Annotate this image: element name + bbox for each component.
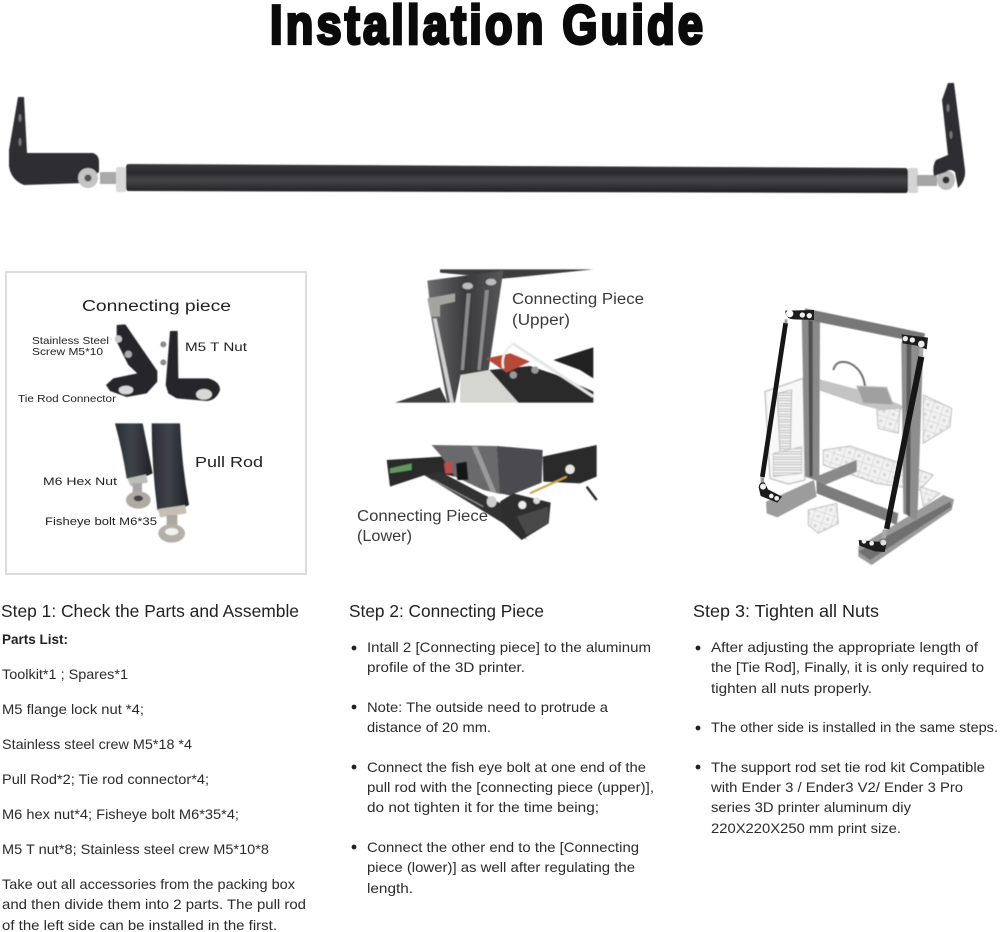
parts list: Pull Rod*2; Tie rod connector*4; bbox=[2, 771, 209, 787]
label: stainless steel screw: Stainless Steel bbox=[32, 335, 109, 347]
bullet: compatibility bbox=[696, 759, 985, 836]
bullet: compatibility: 220X220X250 mm print size. bbox=[711, 820, 901, 836]
pull rod 2 bbox=[152, 423, 189, 511]
bullet: adjust length: tighten all nuts properly. bbox=[711, 680, 872, 696]
parts list: M6 hex nut*4; Fisheye bolt M6*35*4; bbox=[2, 806, 239, 822]
parts list: M5 T nut*8; Stainless steel crew M5*10*8 bbox=[2, 841, 269, 857]
heading: step 2: Step 2: Connecting Piece bbox=[349, 601, 544, 621]
bullet: adjust length bbox=[696, 639, 984, 696]
bullet: compatibility: series 3D printer aluminum diy bbox=[711, 799, 911, 815]
aluminum frame bbox=[766, 308, 954, 565]
right tie rod bbox=[859, 334, 928, 552]
panel: parts photo bbox=[6, 272, 306, 574]
right fisheye bolt bbox=[908, 168, 955, 193]
bullet: compatibility: with Ender 3 / Ender3 V2/ Ender 3 Pro bbox=[710, 779, 963, 795]
label: M5 T nut: M5 T Nut bbox=[185, 340, 248, 354]
bullet: note: Note: The outside need to protrude a bbox=[367, 699, 608, 715]
left fisheye bolt bbox=[78, 167, 126, 192]
instructions paragraph: and then divide them into 2 parts. The pull rod bbox=[2, 896, 306, 912]
pull rod 1 bbox=[115, 423, 153, 479]
heading: step 3: Step 3: Tighten all Nuts bbox=[693, 601, 879, 621]
bullet: install: profile of the 3D printer. bbox=[367, 659, 525, 675]
text block: step 2 bbox=[349, 601, 654, 896]
label: tie rod connector: Tie Rod Connector bbox=[18, 393, 117, 405]
product photo: tie rod with brackets bbox=[9, 83, 965, 193]
bullet: connect other end: piece (lower)] as well after regulating the bbox=[367, 859, 635, 875]
main rod bbox=[126, 164, 908, 193]
parts list: M5 flange lock nut *4; bbox=[2, 701, 144, 717]
label: stainless steel screw: Screw M5*10 bbox=[32, 346, 103, 358]
bullet: install: Intall 2 [Connecting piece] to the aluminum bbox=[367, 639, 651, 655]
instructions paragraph: Take out all accessories from the packing box bbox=[2, 876, 295, 892]
label: fisheye bolt: Fisheye bolt M6*35 bbox=[45, 516, 157, 528]
bullet: note bbox=[352, 699, 608, 735]
label: connecting piece upper: (Upper) bbox=[512, 312, 570, 329]
bullet: connect other end bbox=[352, 839, 639, 896]
ghosted printer parts bbox=[765, 362, 952, 533]
bullet: adjust length: the [Tie Rod], Finally, it is only required to bbox=[711, 659, 984, 675]
right connecting piece bbox=[166, 331, 220, 401]
panel: connecting piece photos bbox=[357, 269, 644, 545]
parts list label: Parts List: bbox=[2, 632, 68, 647]
instructions paragraph bbox=[2, 876, 306, 932]
parts list: Stainless steel crew M5*18 *4 bbox=[2, 736, 192, 752]
bullet: compatibility: The support rod set tie rod kit Compatible bbox=[711, 759, 985, 775]
bullet: connect fish eye bolt: Connect the fish eye bolt at one end of the bbox=[367, 759, 646, 775]
photo: upper connecting piece bbox=[395, 269, 593, 403]
left connecting piece bbox=[106, 324, 157, 397]
right bracket bbox=[933, 83, 965, 188]
bullet: adjust length: After adjusting the appropriate length of bbox=[711, 639, 978, 655]
bullet: other side: The other side is installed in the same steps. bbox=[711, 719, 998, 735]
photo: lower connecting piece bbox=[387, 445, 597, 540]
label: pull rod: Pull Rod bbox=[195, 454, 263, 471]
text block: step 1 bbox=[1, 601, 306, 932]
text block: step 3 bbox=[693, 601, 998, 836]
parts list: Toolkit*1 ; Spares*1 bbox=[2, 666, 128, 682]
label: connecting piece lower: Connecting Piece bbox=[357, 508, 488, 525]
panel: printer frame diagram bbox=[759, 308, 954, 565]
label: connecting piece: Connecting piece bbox=[82, 298, 231, 315]
left bracket bbox=[9, 97, 99, 185]
left tie rod bbox=[759, 310, 814, 503]
bullet: connect fish eye bolt bbox=[352, 759, 654, 815]
bullet: connect other end: length. bbox=[367, 880, 413, 896]
label: connecting piece upper: Connecting Piece bbox=[512, 291, 644, 308]
bullet: connect fish eye bolt: do not tighten it for the time being; bbox=[367, 799, 599, 815]
bullet: connect fish eye bolt: pull rod with the [connecting piece (upper)], bbox=[367, 779, 654, 795]
label: connecting piece lower: (Lower) bbox=[357, 528, 412, 545]
parts list bbox=[2, 666, 269, 857]
bullet: install bbox=[352, 639, 651, 675]
bullet: connect other end: Connect the other end to the [Connecting bbox=[367, 839, 639, 855]
parts illustration bbox=[106, 324, 220, 543]
bullet: note: distance of 20 mm. bbox=[367, 719, 491, 735]
label: M6 hex nut: M6 Hex Nut bbox=[43, 476, 117, 488]
heading: step 1: Step 1: Check the Parts and Assemble bbox=[1, 601, 299, 621]
